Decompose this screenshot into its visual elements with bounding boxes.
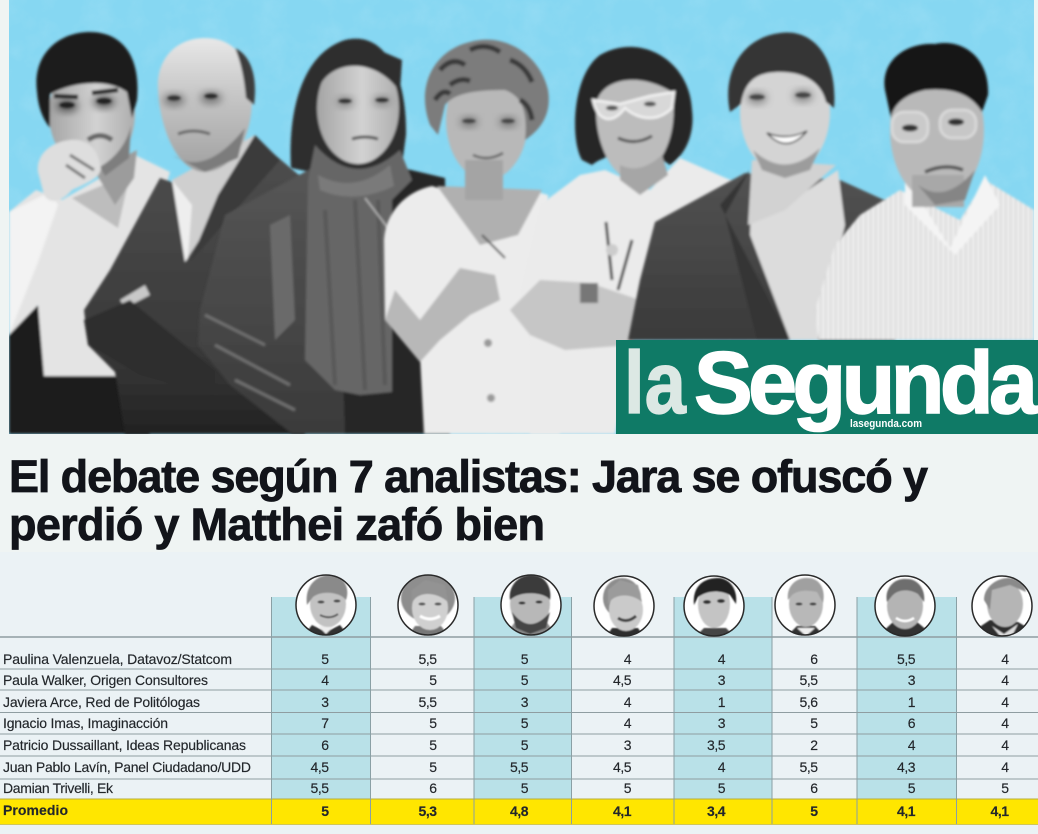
score column 4: 4,5 [613, 672, 632, 688]
candidate portrait 2 [398, 576, 458, 634]
row labels: Juan Pablo Lavín, Panel Ciudadano/UDD [3, 759, 251, 775]
score column 6: 6 [810, 780, 818, 796]
candidate portrait 6 [776, 576, 834, 634]
portrait rings [296, 575, 1032, 636]
score column 4: 5 [624, 780, 632, 796]
candidate portrait 3 [502, 576, 560, 634]
score column 3: 5 [521, 651, 529, 667]
score column 1: 3 [321, 694, 329, 710]
row labels: Javiera Arce, Red de Politólogas [3, 694, 200, 710]
portrait: analyst 4 [384, 40, 560, 434]
score column 7: 4,1 [897, 803, 916, 819]
portrait: analyst 3 [198, 39, 450, 434]
logo: la Segunda: lasegunda.com [850, 418, 922, 430]
score column 6: 2 [810, 737, 818, 753]
score column 3: 5 [521, 780, 529, 796]
score column 4: 3 [624, 737, 632, 753]
score column 4: 4 [624, 694, 632, 710]
score column 8: 4 [1001, 672, 1009, 688]
score column 6: 5,5 [800, 759, 818, 775]
row labels: Patricio Dussaillant, Ideas Republicanas [3, 737, 246, 753]
score column 3 [510, 651, 529, 819]
score column 2: 5 [429, 672, 437, 688]
score column 7: 6 [908, 715, 916, 731]
score column 5: 4 [718, 759, 726, 775]
score column 1: 6 [321, 737, 329, 753]
portrait: analyst 7 [815, 43, 1034, 340]
score column 6: 5 [810, 715, 818, 731]
score column 7: 4 [908, 737, 916, 753]
score column 1: 5 [321, 651, 329, 667]
score column 6: 5 [810, 803, 818, 819]
portrait: analyst 1 [9, 32, 170, 434]
score column 1: 5 [321, 803, 329, 819]
row labels: Paula Walker, Origen Consultores [3, 672, 208, 688]
row labels: Damian Trivelli, Ek [3, 780, 114, 796]
score column 8: 4 [1001, 759, 1009, 775]
sky-blue backdrop [9, 0, 1034, 434]
score column 2: 5,5 [419, 651, 437, 667]
score column 5 [707, 651, 726, 819]
headline [9, 451, 928, 550]
score column 4: 4,1 [613, 803, 632, 819]
candidate portrait 5 [684, 577, 744, 636]
hero photo: seven analysts on a blue background [9, 0, 1034, 434]
score column 6: 5,6 [800, 694, 818, 710]
promedio row background [0, 799, 1038, 824]
score column 5: 1 [718, 694, 726, 710]
score column 1: 4,5 [311, 759, 329, 775]
portrait: analyst 6 [628, 32, 895, 340]
score column 8 [991, 651, 1009, 819]
score column 7: 5 [908, 780, 916, 796]
score column 8: 4 [1001, 651, 1009, 667]
score column 2 [419, 651, 437, 819]
score column 6: 6 [810, 651, 818, 667]
score column 1: 5,5 [311, 780, 329, 796]
logo: la Segunda: Segunda [694, 333, 1038, 432]
score column 5: 3 [718, 715, 726, 731]
score column 5: 4 [718, 651, 726, 667]
score column 3: 4,8 [510, 803, 529, 819]
candidate portrait 8 [972, 576, 1032, 636]
score column 7 [897, 651, 916, 819]
headline: perdió y Matthei zafó bien [9, 499, 545, 550]
score column 2: 6 [429, 780, 437, 796]
score column 6: 5,5 [800, 672, 818, 688]
score column 8: 4 [1001, 737, 1009, 753]
score column 1: 7 [321, 715, 329, 731]
score column 2: 5 [429, 759, 437, 775]
portrait: analyst 2 [84, 38, 305, 434]
logo: la Segunda: la [624, 333, 687, 432]
headline: El debate según 7 analistas: Jara se ofuscó y [9, 451, 928, 502]
score column 4: 4 [624, 651, 632, 667]
table: candidate scores [0, 574, 1038, 825]
score column 1 [311, 651, 329, 819]
score column 5: 3,5 [707, 737, 726, 753]
score column 4: 4 [624, 715, 632, 731]
score column 7: 3 [908, 672, 916, 688]
row labels [3, 651, 251, 818]
score column 8: 4 [1001, 715, 1009, 731]
score column 2: 5 [429, 737, 437, 753]
row labels: Promedio [3, 802, 68, 818]
score column 8: 5 [1001, 780, 1009, 796]
score column 3: 5 [521, 672, 529, 688]
candidate portrait 1 [296, 576, 356, 634]
score column 2: 5,3 [419, 803, 437, 819]
score column 7: 1 [908, 694, 916, 710]
blue column bands [272, 597, 957, 799]
score column 4: 4,5 [613, 759, 632, 775]
score column 3: 3 [521, 694, 529, 710]
row labels: Paulina Valenzuela, Datavoz/Statcom [3, 651, 232, 667]
score column 2: 5,5 [419, 694, 437, 710]
score column 3: 5,5 [510, 759, 529, 775]
candidate portrait 7 [875, 576, 935, 640]
score column 5: 5 [718, 780, 726, 796]
candidate portrait 4 [594, 576, 654, 640]
score column 7: 5,5 [897, 651, 916, 667]
score column 7: 4,3 [897, 759, 916, 775]
score column 1: 4 [321, 672, 329, 688]
score column 5: 3,4 [707, 803, 726, 819]
score column 8: 4 [1001, 694, 1009, 710]
score column 3: 5 [521, 737, 529, 753]
score column 3: 5 [521, 715, 529, 731]
score column 2: 5 [429, 715, 437, 731]
row labels: Ignacio Imas, Imaginacción [3, 715, 168, 731]
portrait: analyst 5 [510, 47, 735, 434]
score column 4 [613, 651, 632, 819]
score column 8: 4,1 [991, 803, 1009, 819]
score column 5: 3 [718, 672, 726, 688]
score column 6 [800, 651, 818, 819]
